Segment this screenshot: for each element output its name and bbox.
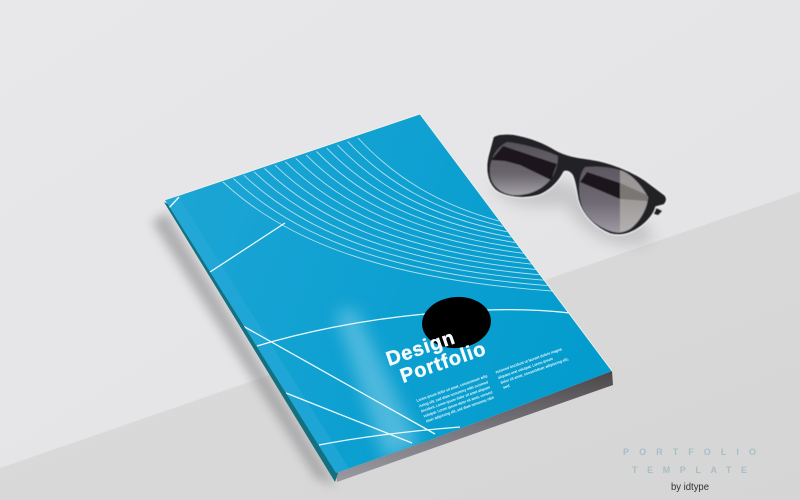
cover body text column 1: volutpat. Lorem ipsum dolor sit amet, consect bbox=[423, 389, 494, 418]
caption line 2: TEMPLATE bbox=[632, 465, 747, 475]
cover title: Portfolio bbox=[397, 338, 489, 388]
left lens bbox=[490, 142, 558, 195]
book shadow bbox=[152, 212, 336, 486]
black circle bbox=[422, 296, 491, 348]
cover artwork bbox=[165, 138, 570, 475]
right lens pale panel bbox=[620, 170, 648, 232]
cover body text column 2: aliquam erat volutpat. Lorem ipsum bbox=[497, 356, 554, 380]
spine edge bbox=[164, 202, 338, 482]
cover title: Design bbox=[383, 327, 458, 371]
frame bbox=[487, 134, 667, 235]
page block edge bbox=[336, 371, 613, 482]
portfolio mockup scene bbox=[0, 114, 800, 500]
credit: by idtype bbox=[671, 482, 709, 493]
spine hinge band bbox=[165, 196, 350, 475]
sunglasses shadow bbox=[490, 180, 655, 246]
cover body text column 2: sed bbox=[502, 383, 511, 390]
footer caption bbox=[623, 447, 756, 493]
caption line 1: PORTFOLIO bbox=[623, 447, 756, 457]
cover body text column 1: iscing elit, sed diam nonummy nibh euismod bbox=[418, 379, 489, 408]
right lens bbox=[579, 167, 648, 233]
gloss highlight bbox=[335, 308, 420, 460]
sunglasses bbox=[487, 134, 667, 235]
cover panel bbox=[165, 114, 612, 473]
cover body text column 1: etuer adipiscing elit, sed diam nonummy nibh bbox=[425, 395, 495, 423]
white accent lines bbox=[168, 197, 570, 445]
left lens inner temple bbox=[491, 146, 557, 180]
cover body text column 2: dolor sit amet, consectetuer adipiscing elit, bbox=[500, 356, 569, 385]
temple tip bbox=[648, 205, 662, 215]
cover paper edge highlight bbox=[165, 114, 612, 371]
background: lower floor plane bbox=[0, 192, 800, 500]
right lens inner temple bbox=[580, 172, 648, 201]
cover body text column 1 bbox=[416, 373, 495, 423]
cover body text column 2 bbox=[495, 346, 569, 390]
cover body text column 1: Lorem ipsum dolor sit amet, consectetuer adip bbox=[416, 373, 489, 403]
thin curved lines bbox=[223, 138, 552, 291]
cover body text column 1: tincidunt. Lorem ipsum dolor sit amet aliquam bbox=[420, 384, 491, 413]
book bbox=[164, 114, 613, 482]
cover body text column 2: euismod tincidunt ut laoreet dolore magna bbox=[495, 346, 563, 374]
